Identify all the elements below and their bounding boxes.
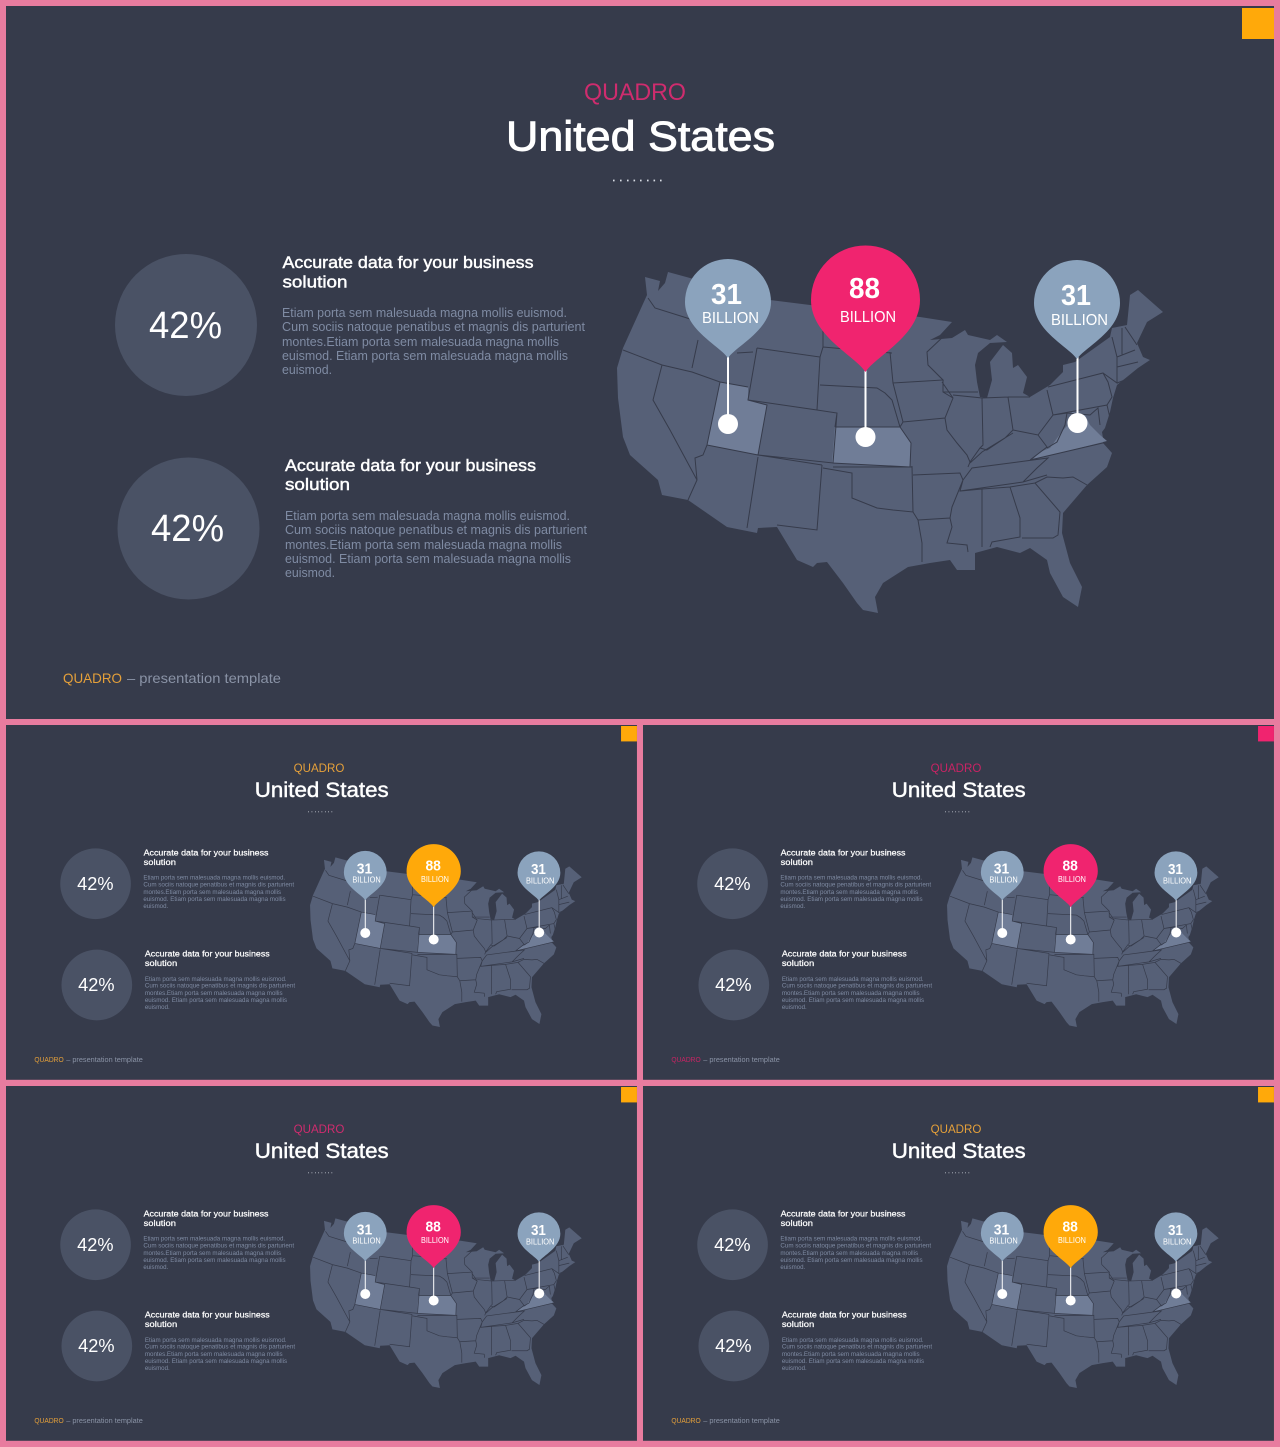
stat circle two: 42% bbox=[151, 508, 224, 550]
text block one: montes.Etiam porta sem malesuada magna mollis bbox=[143, 1250, 281, 1257]
text block one: euismod. Etiam porta sem malesuada magna mollis bbox=[780, 1257, 923, 1264]
text block one: Etiam porta sem malesuada magna mollis euismod. bbox=[282, 306, 567, 320]
stat circle one: 42% bbox=[149, 305, 222, 347]
title: United States bbox=[255, 779, 389, 802]
text block one: Accurate data for your business bbox=[781, 847, 905, 857]
text block one bbox=[143, 1208, 294, 1271]
text block one: Etiam porta sem malesuada magna mollis euismod. bbox=[143, 875, 285, 882]
text block two: Etiam porta sem malesuada magna mollis euismod. bbox=[782, 976, 924, 983]
text block two: euismod. bbox=[145, 1004, 170, 1011]
panel: small slide top right bbox=[643, 725, 1274, 1080]
pin: left 31 billion: BILLION bbox=[702, 310, 759, 327]
pin: right 31 billion: BILLION bbox=[526, 1238, 555, 1247]
footer bbox=[34, 1418, 143, 1425]
pin: right 31 billion: 31 bbox=[1168, 1223, 1183, 1239]
US map bbox=[947, 1218, 1219, 1388]
stat circle two bbox=[698, 1311, 769, 1381]
stat circle one: 42% bbox=[714, 874, 751, 895]
text block one: euismod. bbox=[282, 363, 332, 377]
text block two: montes.Etiam porta sem malesuada magna mollis bbox=[145, 1351, 283, 1358]
text block one: Accurate data for your business bbox=[144, 1208, 268, 1218]
text block two: Accurate data for your business bbox=[145, 948, 270, 958]
corner square bbox=[1242, 8, 1274, 39]
text block two: Cum sociis natoque penatibus et magnis dis parturient bbox=[145, 983, 295, 990]
pin: right 31 billion: 31 bbox=[1168, 862, 1183, 878]
pin: left 31 billion: 31 bbox=[994, 1222, 1009, 1238]
text block two: solution bbox=[285, 475, 350, 494]
text block two: euismod. Etiam porta sem malesuada magna mollis bbox=[285, 552, 571, 566]
pin: centre 88 billion: BILLION bbox=[421, 1236, 449, 1245]
dotted divider bbox=[308, 811, 332, 813]
text block one: Cum sociis natoque penatibus et magnis dis parturient bbox=[780, 1243, 931, 1250]
text block two: Etiam porta sem malesuada magna mollis euismod. bbox=[145, 1337, 287, 1344]
pin: centre 88 billion: BILLION bbox=[1058, 1236, 1086, 1245]
stat circle two bbox=[118, 458, 260, 600]
pin: centre 88 billion: 88 bbox=[849, 273, 880, 305]
corner square bbox=[621, 726, 637, 741]
text block two: montes.Etiam porta sem malesuada magna mollis bbox=[285, 538, 562, 552]
text block two: Cum sociis natoque penatibus et magnis dis parturient bbox=[782, 983, 932, 990]
text block one: solution bbox=[144, 857, 176, 867]
text block two: euismod. bbox=[782, 1004, 807, 1011]
text block one: montes.Etiam porta sem malesuada magna mollis bbox=[780, 889, 918, 896]
text block one: montes.Etiam porta sem malesuada magna mollis bbox=[143, 889, 281, 896]
stat circle one bbox=[115, 254, 257, 396]
pin: centre 88 billion: BILLION bbox=[1058, 875, 1086, 884]
pin: left 31 billion bbox=[981, 851, 1024, 938]
text block two: euismod. Etiam porta sem malesuada magna mollis bbox=[782, 1358, 924, 1365]
text block two: solution bbox=[145, 958, 178, 968]
text block one bbox=[143, 847, 294, 910]
pin: right 31 billion bbox=[1155, 1212, 1197, 1298]
text block two: euismod. Etiam porta sem malesuada magna mollis bbox=[145, 997, 287, 1004]
pin: left 31 billion bbox=[344, 1212, 387, 1299]
stat circle one bbox=[697, 1209, 768, 1280]
stat circle one: 42% bbox=[77, 874, 114, 895]
text block two: solution bbox=[145, 1319, 178, 1329]
pin: centre 88 billion: 88 bbox=[1062, 1219, 1078, 1235]
text block one: euismod. Etiam porta sem malesuada magna mollis bbox=[143, 896, 286, 903]
pin: left 31 billion: 31 bbox=[994, 861, 1009, 877]
stat circle two: 42% bbox=[78, 975, 115, 996]
text block two: euismod. bbox=[782, 1365, 807, 1372]
eyebrow label: QUADRO bbox=[931, 1122, 981, 1136]
panel: small slide bottom left bbox=[6, 1086, 637, 1441]
stat circle two: 42% bbox=[715, 975, 752, 996]
text block two: Accurate data for your business bbox=[285, 456, 536, 475]
footer: QUADRO bbox=[34, 1418, 64, 1425]
pin: right 31 billion: BILLION bbox=[526, 877, 555, 886]
pin: centre 88 billion bbox=[811, 245, 920, 447]
pin: right 31 billion bbox=[518, 1212, 560, 1298]
text block one: euismod. bbox=[780, 903, 805, 910]
US map bbox=[310, 857, 582, 1027]
text block one: solution bbox=[282, 272, 348, 292]
footer: – presentation template bbox=[703, 1418, 780, 1425]
text block two bbox=[145, 948, 295, 1011]
stat circle two: 42% bbox=[78, 1336, 115, 1357]
text block two: euismod. bbox=[285, 566, 335, 580]
text block two bbox=[782, 948, 932, 1011]
US map bbox=[947, 857, 1219, 1027]
text block two: Etiam porta sem malesuada magna mollis euismod. bbox=[145, 976, 287, 983]
text block one: Etiam porta sem malesuada magna mollis euismod. bbox=[780, 875, 922, 882]
panel: small slide bottom right bbox=[643, 1086, 1274, 1441]
title: United States bbox=[892, 779, 1026, 802]
footer: QUADRO bbox=[671, 1418, 701, 1425]
text block two: montes.Etiam porta sem malesuada magna mollis bbox=[782, 1351, 920, 1358]
footer: QUADRO bbox=[34, 1057, 64, 1064]
stat circle two bbox=[61, 1311, 132, 1381]
stat circle one bbox=[60, 1209, 131, 1280]
text block two: euismod. bbox=[145, 1365, 170, 1372]
text block two: Cum sociis natoque penatibus et magnis dis parturient bbox=[145, 1344, 295, 1351]
dotted divider bbox=[308, 1172, 332, 1174]
text block one: Cum sociis natoque penatibus et magnis dis parturient bbox=[143, 882, 294, 889]
pin: right 31 billion bbox=[518, 851, 560, 937]
text block one bbox=[780, 847, 931, 910]
panel: small slide top left bbox=[6, 725, 637, 1080]
eyebrow label: QUADRO bbox=[931, 761, 981, 775]
text block one: euismod. Etiam porta sem malesuada magna mollis bbox=[780, 896, 923, 903]
stat circle one bbox=[60, 848, 131, 919]
stat circle two bbox=[698, 950, 769, 1020]
corner square bbox=[1258, 726, 1274, 741]
pin: left 31 billion: BILLION bbox=[989, 876, 1018, 885]
eyebrow label: QUADRO bbox=[294, 761, 344, 775]
title: United States bbox=[506, 112, 775, 160]
eyebrow label: QUADRO bbox=[584, 79, 686, 106]
pin: left 31 billion: 31 bbox=[711, 279, 742, 311]
footer: – presentation template bbox=[703, 1057, 780, 1064]
text block two: solution bbox=[782, 958, 815, 968]
text block one: Cum sociis natoque penatibus et magnis dis parturient bbox=[282, 320, 585, 334]
pin: left 31 billion bbox=[685, 259, 771, 434]
pin: centre 88 billion: BILLION bbox=[421, 875, 449, 884]
text block one: euismod. bbox=[780, 1264, 805, 1271]
footer: – presentation template bbox=[127, 670, 281, 686]
stat circle one bbox=[697, 848, 768, 919]
pin: right 31 billion: 31 bbox=[531, 1223, 546, 1239]
text block two: solution bbox=[782, 1319, 815, 1329]
footer: – presentation template bbox=[66, 1057, 143, 1064]
pin: left 31 billion: BILLION bbox=[352, 1237, 381, 1246]
title: United States bbox=[255, 1140, 389, 1163]
footer: QUADRO bbox=[671, 1057, 701, 1064]
text block one: Accurate data for your business bbox=[781, 1208, 905, 1218]
footer bbox=[34, 1057, 143, 1064]
text block one: euismod. bbox=[143, 1264, 168, 1271]
pin: right 31 billion: 31 bbox=[531, 862, 546, 878]
eyebrow label: QUADRO bbox=[294, 1122, 344, 1136]
text block one: Etiam porta sem malesuada magna mollis euismod. bbox=[780, 1236, 922, 1243]
text block one bbox=[780, 1208, 931, 1271]
pin: right 31 billion bbox=[1034, 260, 1120, 433]
dotted divider bbox=[945, 1172, 969, 1174]
stat circle two bbox=[61, 950, 132, 1020]
pin: right 31 billion: BILLION bbox=[1163, 1238, 1192, 1247]
text block one: euismod. bbox=[143, 903, 168, 910]
corner square bbox=[621, 1087, 637, 1102]
text block two: euismod. Etiam porta sem malesuada magna mollis bbox=[145, 1358, 287, 1365]
pin: left 31 billion: BILLION bbox=[989, 1237, 1018, 1246]
text block two: Cum sociis natoque penatibus et magnis dis parturient bbox=[285, 523, 587, 537]
footer: QUADRO bbox=[63, 670, 122, 686]
corner square bbox=[1258, 1087, 1274, 1102]
pin: right 31 billion: BILLION bbox=[1163, 877, 1192, 886]
US map bbox=[310, 1218, 582, 1388]
text block two bbox=[782, 1309, 932, 1372]
text block two: euismod. Etiam porta sem malesuada magna mollis bbox=[782, 997, 924, 1004]
pin: centre 88 billion: 88 bbox=[425, 1219, 441, 1235]
text block one: Etiam porta sem malesuada magna mollis euismod. bbox=[143, 1236, 285, 1243]
pin: right 31 billion bbox=[1155, 851, 1197, 937]
dotted divider bbox=[613, 180, 662, 182]
text block two: Cum sociis natoque penatibus et magnis dis parturient bbox=[782, 1344, 932, 1351]
stat circle one: 42% bbox=[77, 1235, 114, 1256]
footer bbox=[671, 1057, 780, 1064]
pin: left 31 billion: BILLION bbox=[352, 876, 381, 885]
pin: centre 88 billion: 88 bbox=[1062, 858, 1078, 874]
stat circle one: 42% bbox=[714, 1235, 751, 1256]
pin: centre 88 billion: 88 bbox=[425, 858, 441, 874]
text block one: solution bbox=[144, 1218, 176, 1228]
text block two bbox=[285, 456, 587, 580]
pin: left 31 billion bbox=[981, 1212, 1024, 1299]
pin: centre 88 billion bbox=[1044, 1205, 1098, 1305]
pin: left 31 billion: 31 bbox=[357, 861, 372, 877]
text block two: montes.Etiam porta sem malesuada magna mollis bbox=[145, 990, 283, 997]
text block one: euismod. Etiam porta sem malesuada magna mollis bbox=[143, 1257, 286, 1264]
title: United States bbox=[892, 1140, 1026, 1163]
pin: right 31 billion: 31 bbox=[1061, 280, 1091, 312]
text block two: Etiam porta sem malesuada magna mollis euismod. bbox=[782, 1337, 924, 1344]
footer: – presentation template bbox=[66, 1418, 143, 1425]
stat circle two: 42% bbox=[715, 1336, 752, 1357]
text block two: Accurate data for your business bbox=[145, 1309, 270, 1319]
text block one: Accurate data for your business bbox=[282, 253, 534, 272]
pin: centre 88 billion: BILLION bbox=[840, 309, 896, 326]
US map bbox=[617, 272, 1163, 613]
pin: centre 88 billion bbox=[407, 844, 461, 944]
text block one: Cum sociis natoque penatibus et magnis dis parturient bbox=[780, 882, 931, 889]
text block one: solution bbox=[781, 857, 813, 867]
text block two: Accurate data for your business bbox=[782, 1309, 907, 1319]
text block two: montes.Etiam porta sem malesuada magna mollis bbox=[782, 990, 920, 997]
text block one: montes.Etiam porta sem malesuada magna mollis bbox=[282, 335, 559, 349]
text block one: montes.Etiam porta sem malesuada magna mollis bbox=[780, 1250, 918, 1257]
pin: left 31 billion bbox=[344, 851, 387, 938]
text block two: Accurate data for your business bbox=[782, 948, 907, 958]
text block one: euismod. Etiam porta sem malesuada magna mollis bbox=[282, 349, 568, 363]
text block one bbox=[282, 253, 585, 377]
footer bbox=[671, 1418, 780, 1425]
text block one: Cum sociis natoque penatibus et magnis dis parturient bbox=[143, 1243, 294, 1250]
pin: centre 88 billion bbox=[1044, 844, 1098, 944]
pin: left 31 billion: 31 bbox=[357, 1222, 372, 1238]
text block two bbox=[145, 1309, 295, 1372]
text block one: solution bbox=[781, 1218, 813, 1228]
pin: centre 88 billion bbox=[407, 1205, 461, 1305]
panel: main slide bbox=[6, 6, 1274, 719]
pin: right 31 billion: BILLION bbox=[1051, 312, 1108, 329]
text block one: Accurate data for your business bbox=[144, 847, 268, 857]
text block two: Etiam porta sem malesuada magna mollis euismod. bbox=[285, 509, 570, 523]
dotted divider bbox=[945, 811, 969, 813]
footer bbox=[63, 670, 281, 686]
